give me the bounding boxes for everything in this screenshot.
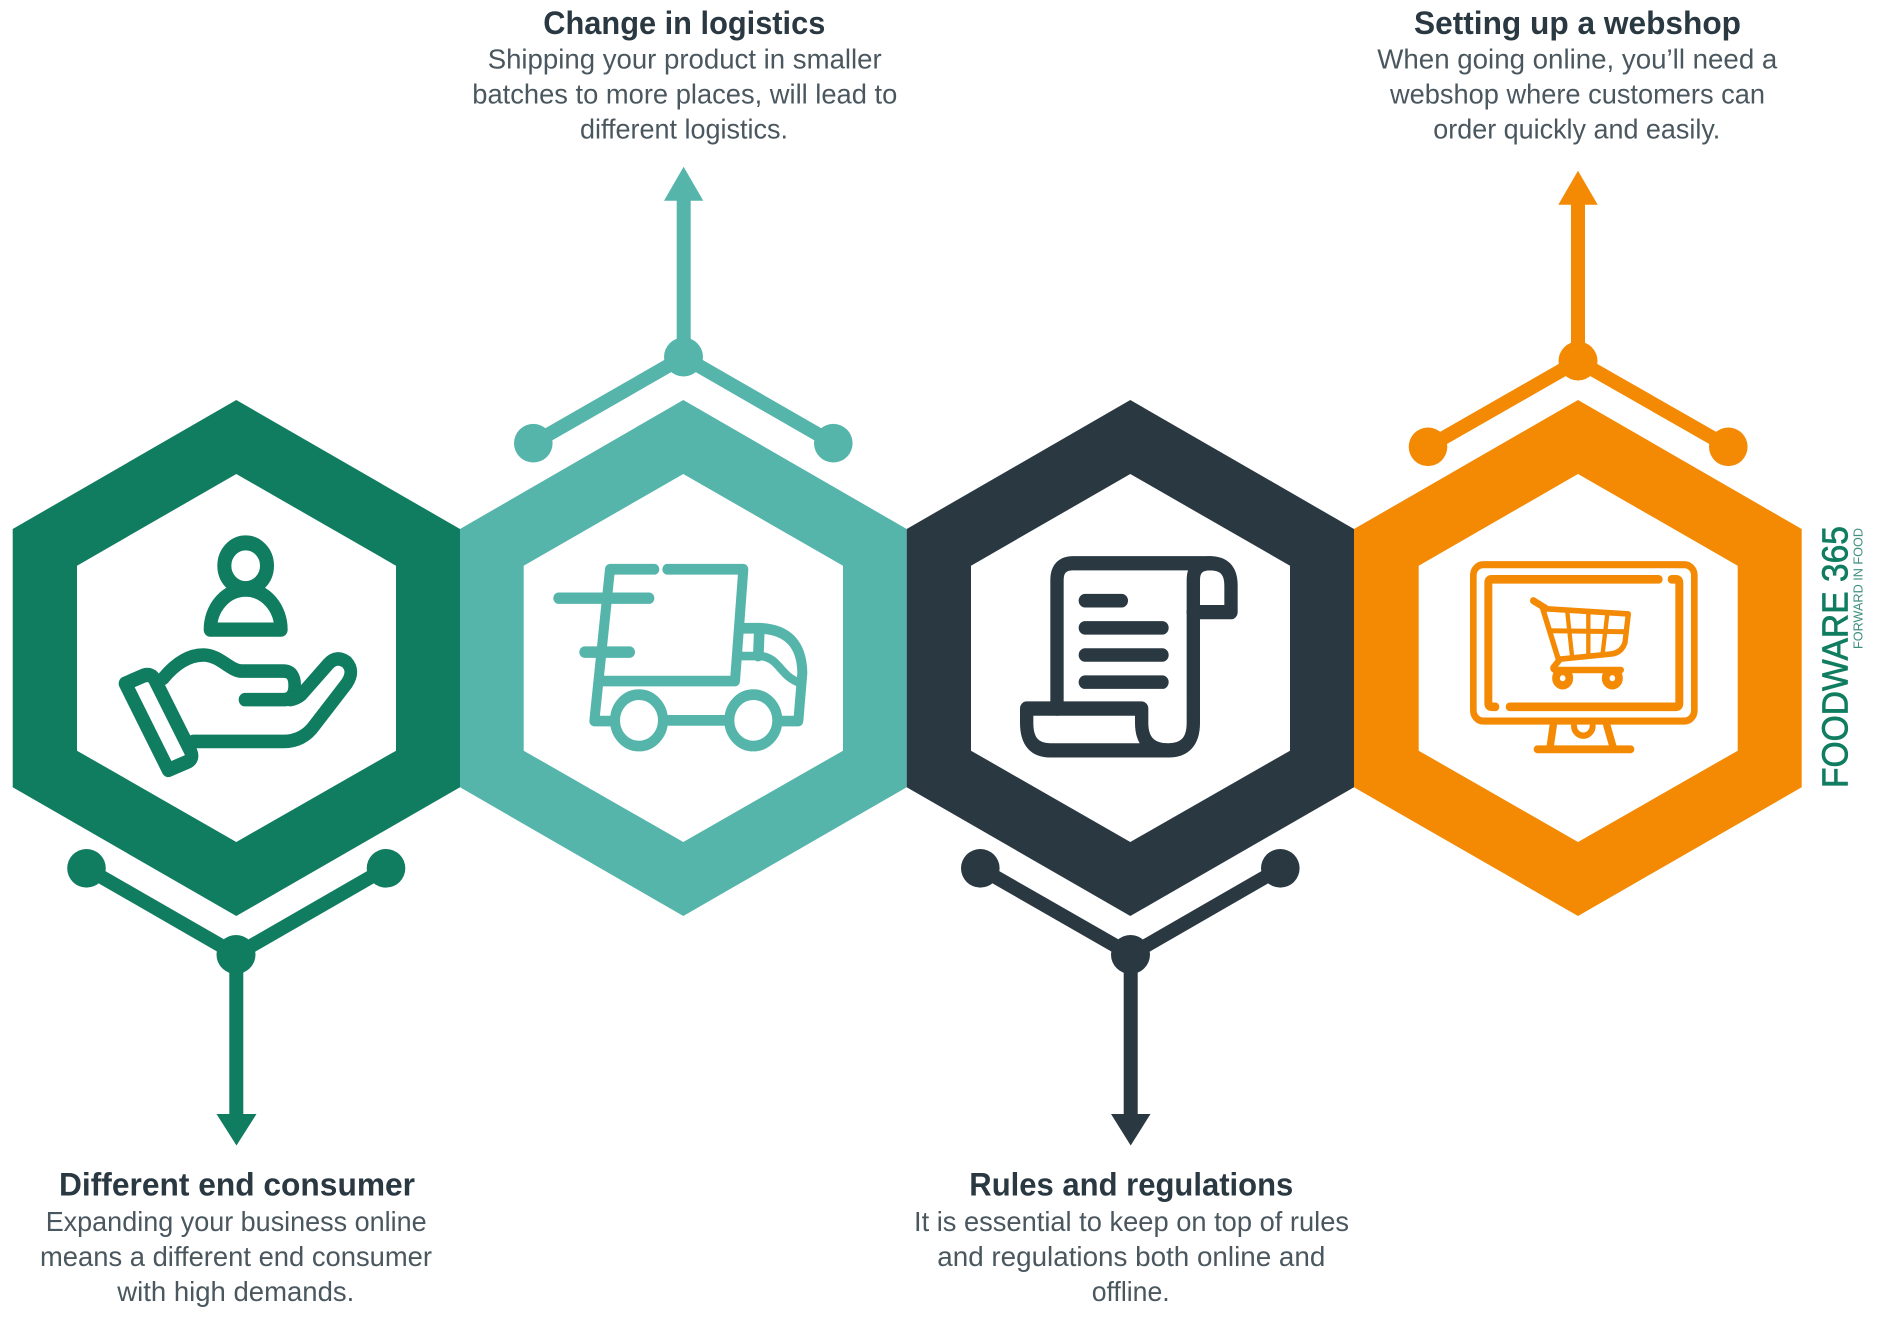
text block: When going online, you’ll need a bbox=[1377, 44, 1778, 74]
text block: webshop where customers can bbox=[1389, 78, 1765, 110]
icon: delivery truck bbox=[559, 569, 802, 746]
arrow: down bbox=[1111, 935, 1150, 1146]
connector: branches bbox=[67, 849, 405, 954]
text block: with high demands. bbox=[116, 1276, 354, 1307]
text block: means a different end consumer bbox=[40, 1241, 432, 1272]
text block: different logistics. bbox=[580, 114, 788, 144]
text block: offline. bbox=[1092, 1276, 1170, 1307]
arrow: up bbox=[1558, 171, 1598, 380]
heading: Rules and regulations bbox=[969, 1166, 1293, 1202]
arrow: up bbox=[664, 167, 703, 376]
text block bbox=[40, 1206, 432, 1307]
hexagon: dark bbox=[907, 400, 1354, 916]
heading: Setting up a webshop bbox=[1414, 5, 1741, 41]
connector: branches bbox=[961, 849, 1300, 954]
text block bbox=[914, 1206, 1349, 1307]
panel: change in logistics bbox=[460, 5, 907, 916]
text block bbox=[472, 44, 897, 144]
hexagon: green bbox=[13, 400, 460, 916]
arrow: down bbox=[216, 935, 256, 1146]
hexagon: teal bbox=[460, 400, 907, 916]
heading: Different end consumer bbox=[59, 1166, 415, 1202]
panel: setting up a webshop bbox=[1354, 5, 1802, 916]
panel: different end consumer bbox=[13, 400, 460, 1307]
text block: order quickly and easily. bbox=[1433, 114, 1720, 144]
text block bbox=[1377, 44, 1778, 144]
panel: rules and regulations bbox=[907, 400, 1354, 1307]
text block: batches to more places, will lead to bbox=[472, 78, 897, 110]
logo: Foodware 365: FORWARD IN FOOD bbox=[1851, 528, 1866, 649]
text block: and regulations both online and bbox=[937, 1241, 1325, 1272]
connector: branches bbox=[514, 357, 853, 463]
hexagon: orange bbox=[1354, 400, 1802, 916]
icon: scroll document bbox=[1027, 563, 1231, 750]
text block: Expanding your business online bbox=[46, 1206, 427, 1237]
logo: Foodware 365: FOODWARE 365 bbox=[1815, 526, 1856, 788]
text block: Shipping your product in smaller bbox=[488, 44, 882, 74]
connector: branches bbox=[1409, 361, 1748, 466]
icon: hand holding person bbox=[125, 543, 351, 770]
text block: It is essential to keep on top of rules bbox=[914, 1206, 1349, 1237]
icon: monitor with shopping cart bbox=[1473, 565, 1694, 749]
heading: Change in logistics bbox=[543, 5, 825, 41]
